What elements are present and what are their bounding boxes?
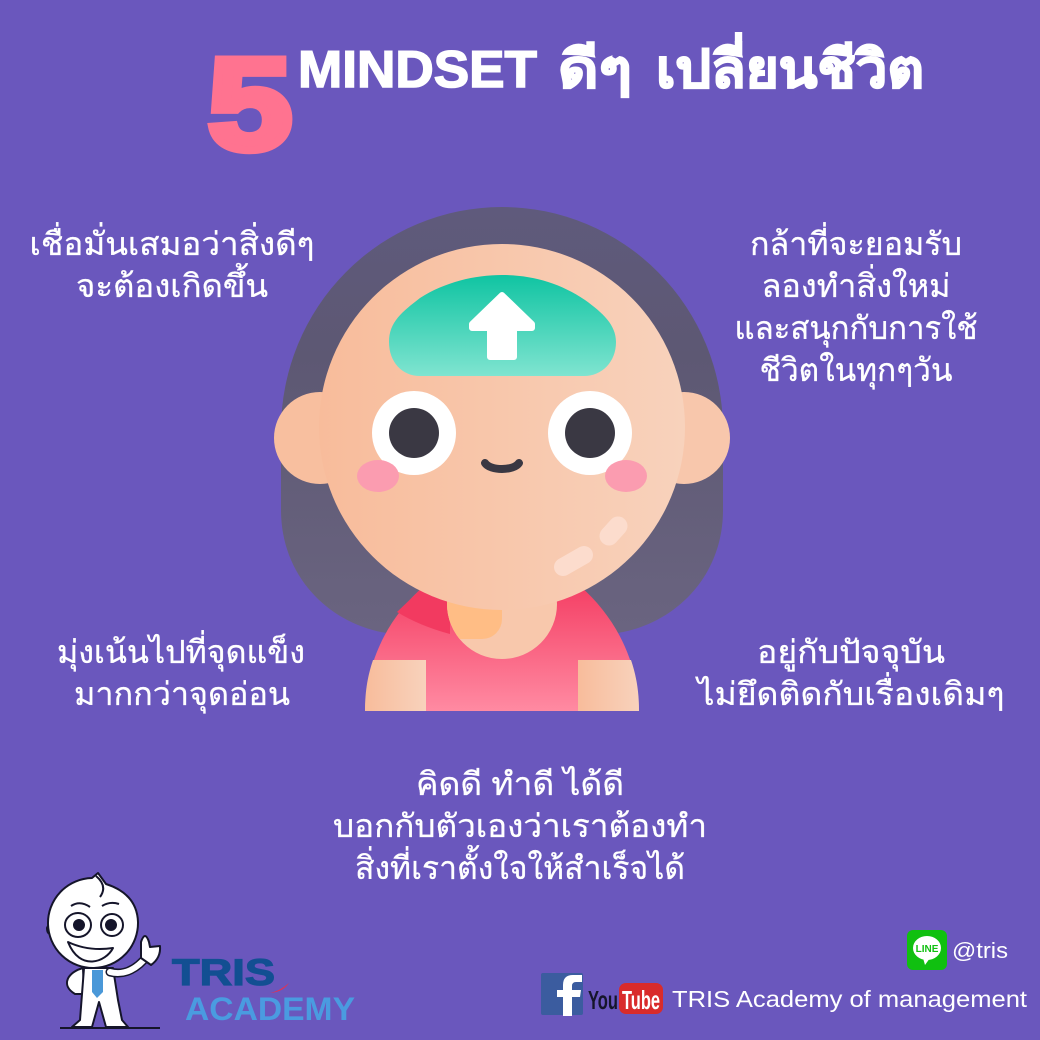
left eye [372, 391, 456, 475]
text: bottom-left mindset: มากกว่าจุดอ่อน [74, 676, 290, 714]
title: MINDSET [298, 41, 537, 99]
logo: TRIS Academy [172, 952, 355, 1027]
icon: YouTube: You [588, 985, 618, 1015]
text: bottom-right mindset [694, 634, 1004, 712]
illustration: character head and body [274, 207, 730, 711]
text: top-right mindset: กล้าที่จะยอมรับ [750, 222, 962, 262]
text: top-left mindset [30, 222, 314, 304]
icon: Facebook [541, 973, 583, 1016]
brain panel with arrow [389, 275, 616, 376]
icon: YouTube: Tube [622, 985, 660, 1015]
mascot [47, 873, 160, 1028]
right sleeve skin [578, 660, 639, 711]
title number 5: 5 [208, 31, 292, 177]
icon: LINE [907, 930, 947, 970]
text: line handle: @tris [952, 938, 1008, 963]
logo: TRIS Academy: ACADEMY [185, 991, 355, 1027]
icon: YouTube [588, 983, 663, 1015]
text: bottom-centre mindset: สิ่งที่เราตั้งใจให้สำเร็จได้ [355, 845, 685, 886]
text: bottom-right mindset: ไม่ยึดติดกับเรื่องเดิมๆ [694, 672, 1004, 712]
text: top-left mindset: จะต้องเกิดขึ้น [76, 263, 268, 304]
shirt [365, 585, 639, 711]
icon: LINE: LINE [916, 944, 939, 955]
title [298, 33, 924, 99]
text: bottom-left mindset [57, 630, 305, 714]
logo: TRIS Academy: TRIS [172, 952, 275, 993]
left sleeve skin [365, 660, 426, 711]
right cheek [605, 460, 647, 492]
left cheek [357, 460, 399, 492]
smile [485, 463, 519, 469]
title: ดีๆ [558, 41, 632, 99]
text: top-right mindset: ชีวิตในทุกๆวัน [760, 352, 953, 390]
right eye [548, 391, 632, 475]
text: top-left mindset: เชื่อมั่นเสมอว่าสิ่งดีๆ [30, 222, 314, 262]
text: top-right mindset: ลองทำสิ่งใหม่ [762, 264, 950, 304]
title: เปลี่ยนชีวิต [656, 33, 924, 99]
right ear [638, 392, 730, 484]
text: bottom-centre mindset: คิดดี ทำดี ได้ดี [416, 766, 624, 802]
face [319, 244, 685, 610]
text: bottom-centre mindset: บอกกับตัวเองว่าเราต้องทำ [333, 808, 707, 844]
hair [281, 207, 723, 634]
shirt shadow [397, 590, 450, 634]
text: top-right mindset [734, 222, 978, 390]
text: bottom-centre mindset [333, 766, 707, 886]
text: top-right mindset: และสนุกกับการใช้ [734, 310, 978, 348]
left ear [274, 392, 366, 484]
text: bottom-right mindset: อยู่กับปัจจุบัน [757, 634, 945, 672]
text: bottom-left mindset: มุ่งเน้นไปที่จุดแข็ง [57, 630, 305, 672]
face highlights [563, 526, 618, 567]
text: Facebook and YouTube name: TRIS Academy of management [672, 986, 1028, 1012]
neck [447, 602, 557, 659]
